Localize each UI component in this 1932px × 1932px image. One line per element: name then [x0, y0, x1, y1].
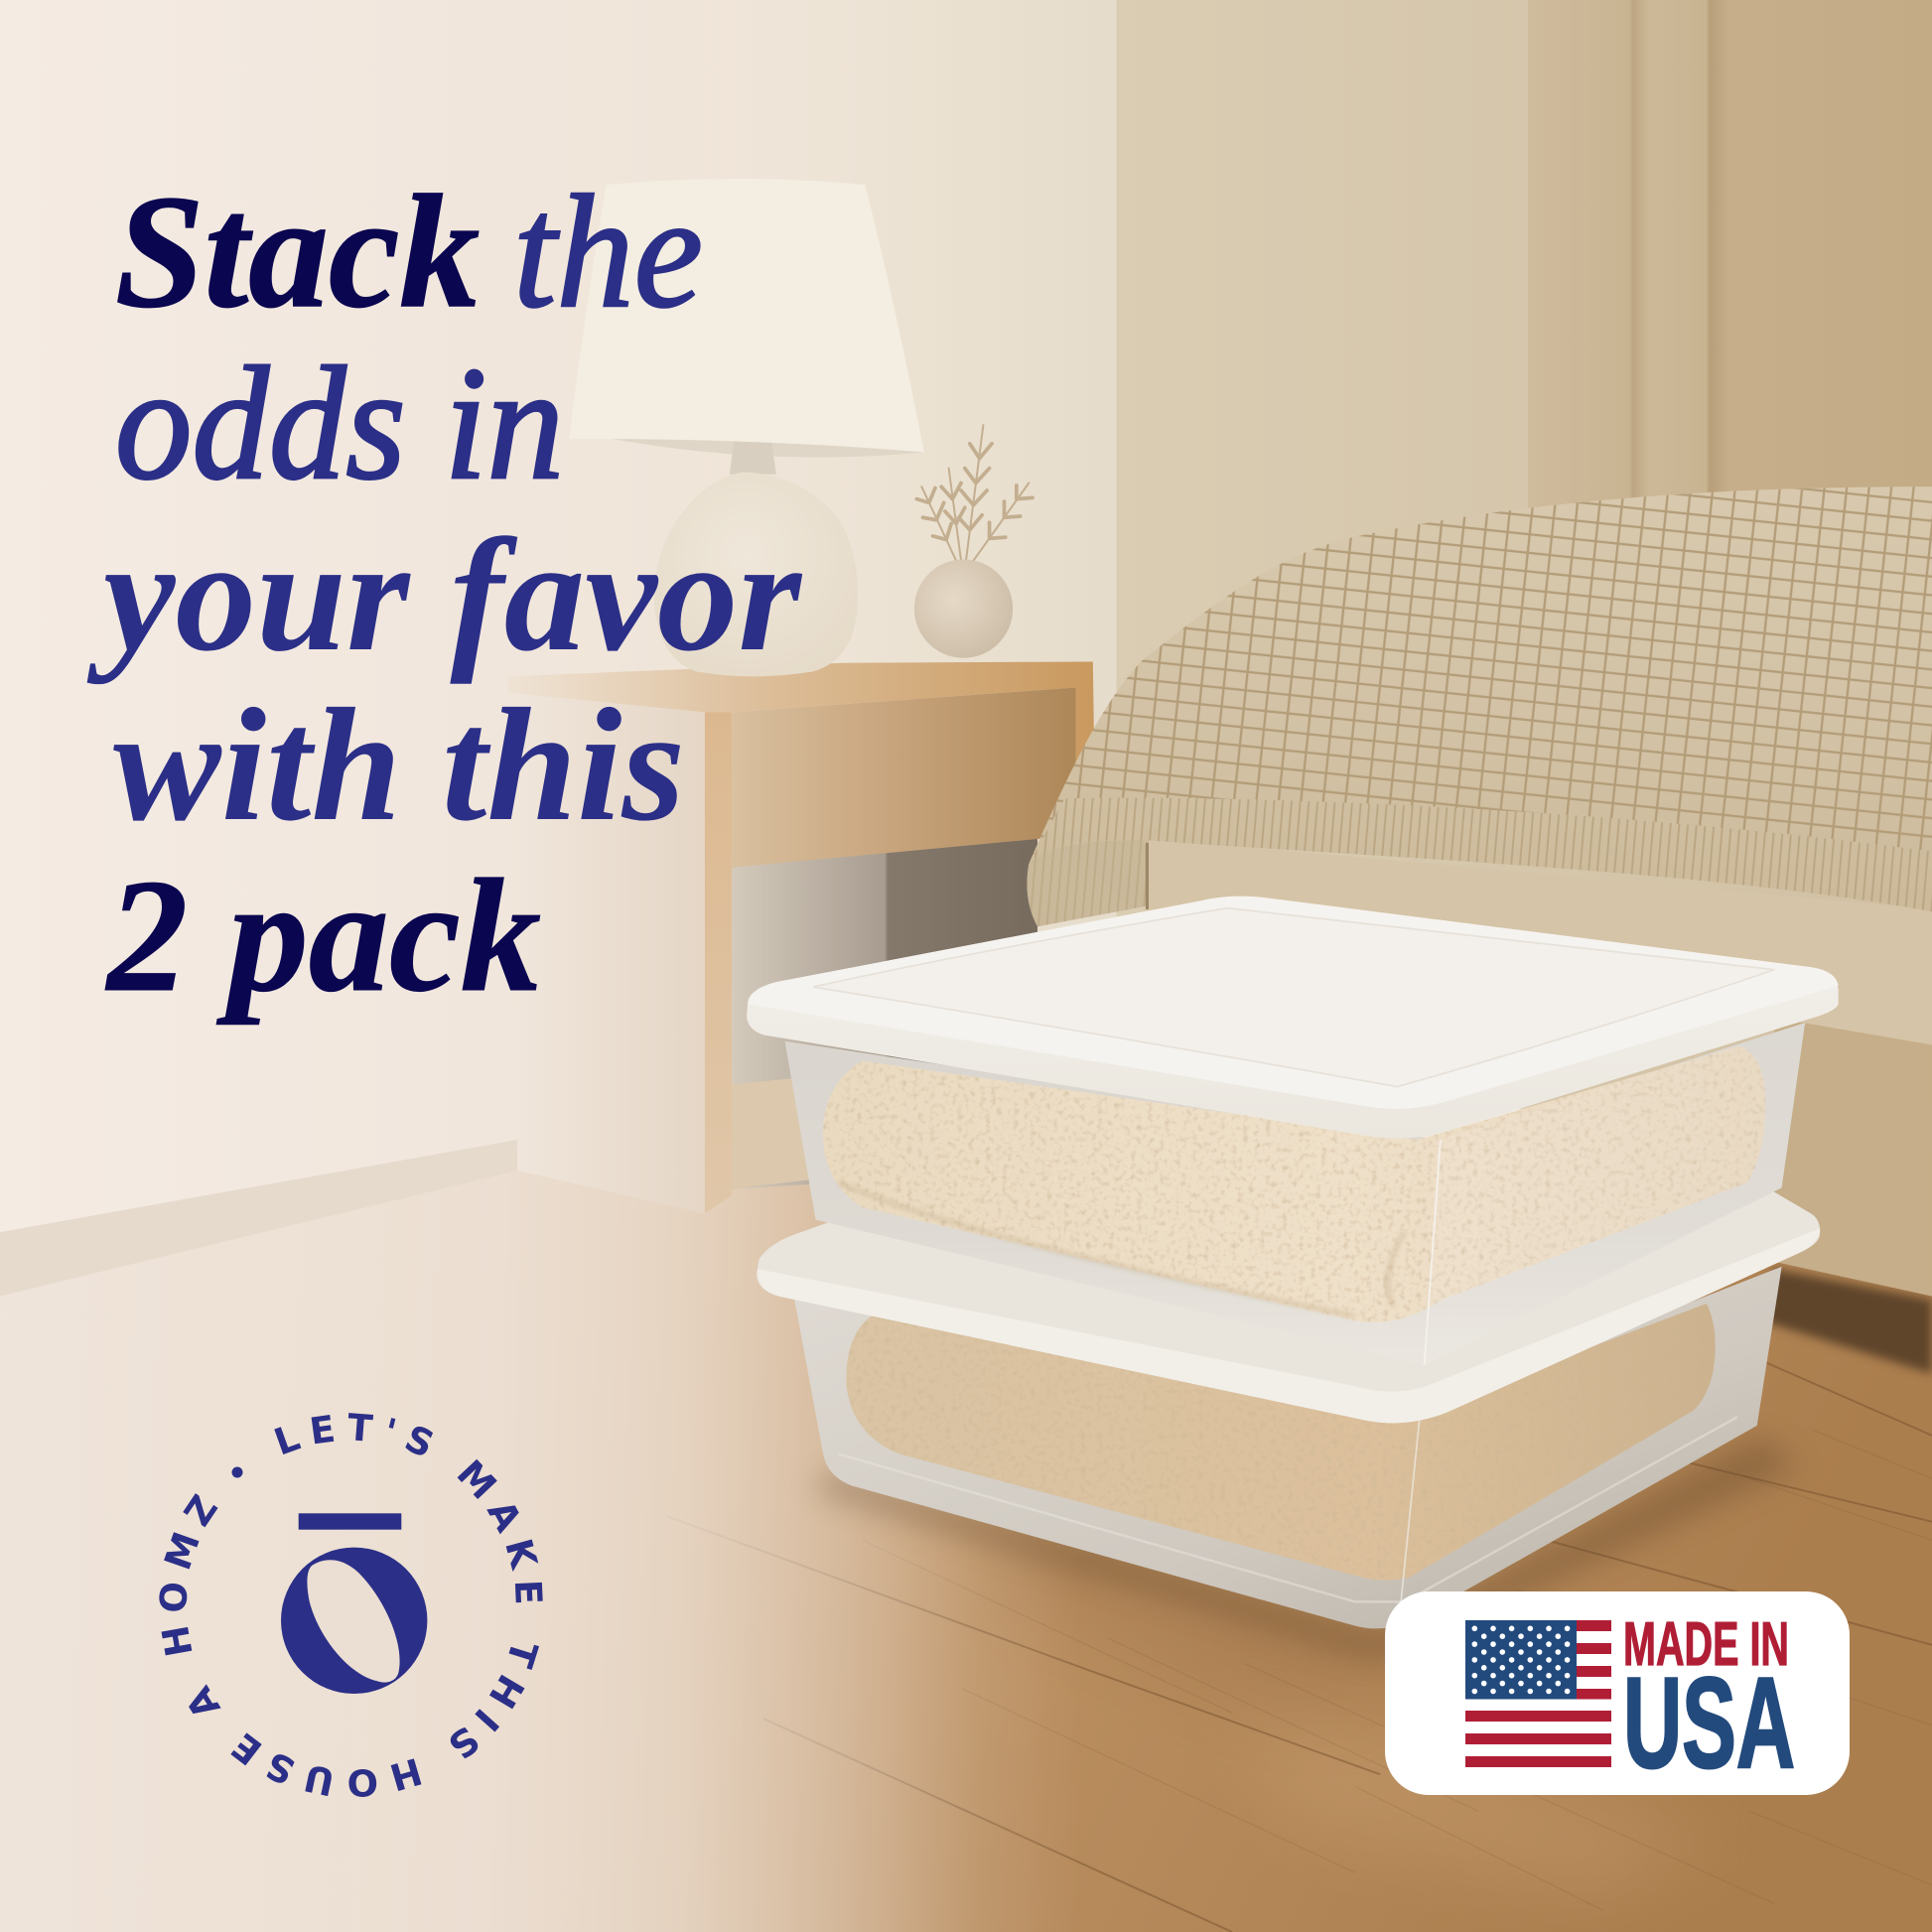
floor tint — [0, 1171, 986, 1932]
headline word: Stack: Stack — [115, 163, 480, 342]
wood floor — [0, 1146, 1932, 1932]
lower blanket — [846, 1304, 1716, 1581]
duvet fold underside — [1027, 840, 1149, 926]
nightstand front leg — [705, 705, 732, 1213]
made in USA badge — [1385, 1591, 1850, 1795]
right wall — [1116, 0, 1932, 1109]
upper blanket — [823, 1046, 1765, 1322]
baseboard — [0, 1140, 517, 1297]
table lamp — [569, 179, 924, 676]
upper box body — [785, 1023, 1805, 1365]
duvet — [1027, 486, 1932, 926]
upper storage box — [747, 897, 1839, 1365]
lower lid — [757, 1180, 1820, 1423]
circular brand logo — [159, 1413, 543, 1797]
lower storage box — [757, 1180, 1820, 1663]
headline word: the: the — [513, 163, 703, 342]
nightstand — [507, 661, 1094, 1213]
curtain — [1528, 0, 1932, 542]
logo mark: tilted O — [281, 1548, 427, 1694]
left wall — [0, 0, 1116, 1232]
logo mark: bar — [299, 1513, 401, 1530]
headline line: with this: with this — [113, 676, 685, 855]
lower box shadow — [813, 1436, 1799, 1663]
nightstand open shelf — [732, 835, 1037, 1189]
logo ring text: LET'S MAKE THIS HOUSE A HOMZ — [159, 1413, 543, 1797]
nightstand top — [507, 661, 1094, 838]
headline — [86, 163, 803, 1026]
nightstand side panel — [511, 692, 705, 1213]
headline line: odds in: odds in — [115, 335, 564, 513]
logo ring dot — [232, 1467, 242, 1477]
lower box floor rim — [838, 1417, 1737, 1601]
upper lid — [747, 897, 1839, 1138]
upper box frosted pane — [1425, 1023, 1805, 1365]
lower box body — [792, 1267, 1782, 1628]
vase with dried stems — [914, 425, 1033, 658]
american flag — [1465, 1620, 1611, 1767]
upper box corner line — [1425, 1140, 1441, 1365]
duvet hem — [1029, 798, 1932, 911]
badge text: MADE IN: MADE IN — [1623, 1610, 1789, 1679]
nightstand drawer — [732, 688, 1075, 868]
bed base and mattress — [1146, 838, 1932, 1374]
headline line: 2 pack: 2 pack — [105, 847, 541, 1026]
badge text: USA: USA — [1623, 1650, 1795, 1795]
blanket roll shading — [838, 1182, 1405, 1315]
headline line: your favor: your favor — [86, 506, 803, 685]
lower box corner line — [1399, 1420, 1420, 1626]
